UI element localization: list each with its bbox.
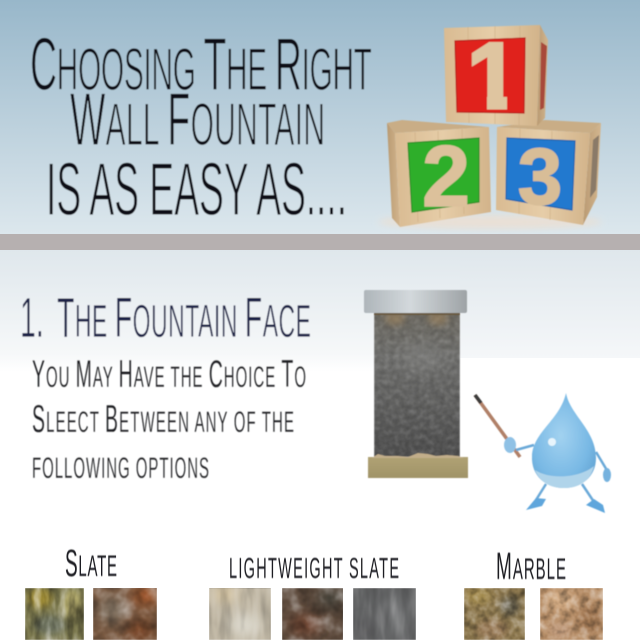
swatch: lightweight slate 3 — [353, 588, 416, 640]
swatch: slate 1 — [25, 588, 84, 640]
fountain image — [364, 290, 468, 478]
heading: slate: SLATE — [65, 543, 117, 585]
title: CHOOSING THE RIGHT — [30, 22, 372, 106]
swatch: marble 2 — [540, 588, 603, 640]
block 2 — [387, 120, 491, 227]
heading: marble: MARBLE — [496, 546, 566, 588]
block 1: 1 — [467, 23, 519, 128]
heading: the fountain face: THE FOUNTAIN FACE — [57, 285, 311, 350]
swatch: lightweight slate 2 — [282, 588, 344, 640]
title: WALL FOUNTAIN — [70, 77, 325, 161]
block 3: 3 — [518, 132, 562, 221]
text block: intro: YOU MAY HAVE THE CHOICE TO — [32, 352, 306, 396]
block 2: 2 — [422, 129, 470, 225]
title — [30, 22, 372, 231]
icon: water drop character — [475, 393, 611, 513]
swatch: lightweight slate 1 — [209, 586, 271, 640]
swatch: marble 1 — [464, 588, 525, 640]
block 1 — [444, 23, 548, 128]
block 3 — [496, 120, 601, 225]
text block: intro: SLEECT BETWEEN ANY OF THE — [32, 397, 294, 441]
title: IS AS EASY AS.... — [46, 147, 347, 231]
icon: number blocks — [378, 23, 602, 229]
swatch: slate 2 — [93, 587, 157, 640]
text block: intro: FOLLOWING OPTIONS — [32, 453, 209, 486]
text block: intro — [32, 352, 306, 486]
heading: lightweight slate: LIGHTWEIGHT SLATE — [229, 551, 399, 584]
heading: the fountain face: 1. — [20, 285, 44, 350]
